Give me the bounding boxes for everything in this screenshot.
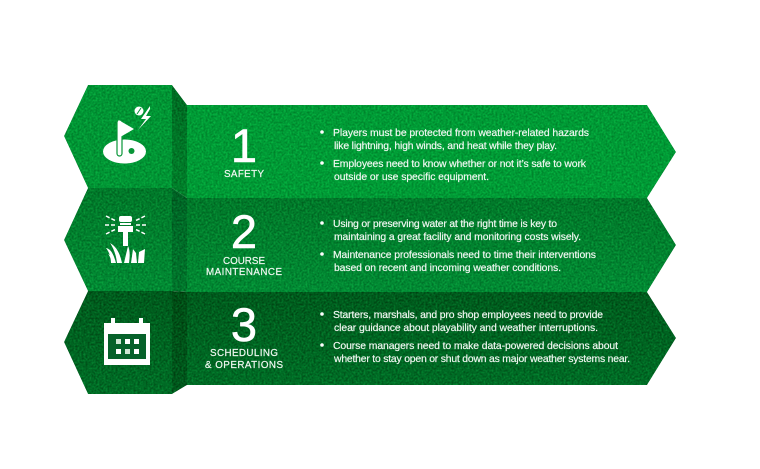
heading: 2 course maintenance: COURSE <box>223 256 265 267</box>
heading: 2 course maintenance <box>206 205 282 278</box>
icon: calendar <box>104 318 150 365</box>
text block: safety bullets: Players must be protected from weather-related hazards <box>333 128 589 139</box>
panel: course maintenance band <box>187 198 676 292</box>
text block: maintenance bullets: based on recent and incoming weather conditions. <box>334 263 561 274</box>
panel: safety icon tab <box>64 85 172 188</box>
text block: scheduling bullets: whether to stay open or shut down as major weather systems near. <box>333 354 630 365</box>
panel: scheduling icon tab <box>64 291 172 394</box>
heading: 3 scheduling and operations <box>205 298 283 371</box>
panel: safety band <box>187 105 676 198</box>
text block: safety bullets <box>320 128 589 183</box>
fold: scheduling <box>172 291 187 394</box>
text block: safety bullets: like lightning, high winds, and heat while they play. <box>334 141 557 152</box>
fold: maintenance <box>172 188 187 292</box>
heading: 1 safety: 1 <box>231 119 257 172</box>
panel: maintenance icon tab <box>64 188 172 291</box>
text block: safety bullets: outside or use specific equipment. <box>334 172 489 183</box>
heading: 2 course maintenance: 2 <box>231 205 257 258</box>
text block: safety bullets: Employees need to know whether or not it’s safe to work <box>333 159 587 170</box>
heading: 3 scheduling and operations: 3 <box>231 298 257 351</box>
grass chevron panels <box>64 85 676 394</box>
icon: golf flag with weather alert <box>103 106 151 164</box>
heading: 3 scheduling and operations: & OPERATIONS <box>205 360 283 371</box>
text block: maintenance bullets: Using or preserving water at the right time is key to <box>333 219 557 230</box>
text block: scheduling bullets: Starters, marshals, and pro shop employees need to provide <box>333 310 603 321</box>
text block: maintenance bullets: maintaining a great facility and monitoring costs wisely. <box>334 232 581 243</box>
text block: scheduling bullets: Course managers need to make data-powered decisions about <box>333 341 618 352</box>
text block: maintenance bullets <box>320 219 596 274</box>
heading: 1 safety: SAFETY <box>224 169 264 180</box>
panel: scheduling band <box>187 292 676 385</box>
heading: 3 scheduling and operations: SCHEDULING <box>210 348 278 359</box>
text block: scheduling bullets <box>320 310 630 365</box>
heading: 2 course maintenance: MAINTENANCE <box>206 267 282 278</box>
text block: maintenance bullets: Maintenance professionals need to time their interventions <box>333 250 596 261</box>
icon: irrigation sprinkler and grass <box>105 216 146 263</box>
text block: scheduling bullets: clear guidance about playability and weather interruptions. <box>334 323 598 334</box>
fold: safety <box>172 85 187 198</box>
heading: 1 safety <box>224 119 264 180</box>
